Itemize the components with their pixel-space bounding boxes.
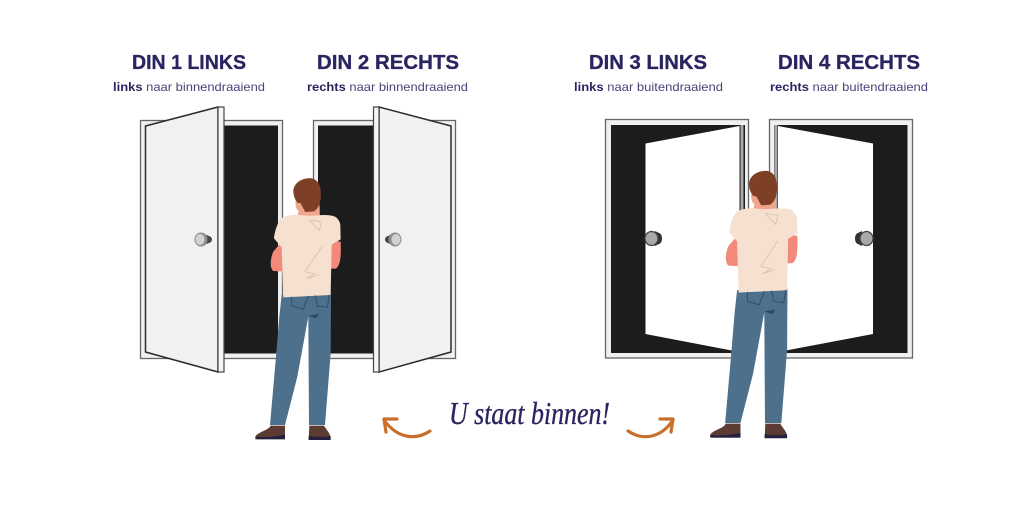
- subheading: links naar binnendraaiend: links naar binnendraaiend: [113, 80, 265, 94]
- subheading: links naar buitendraaiend: links naar buitendraaiend: [574, 80, 723, 94]
- door: DIN 4 right outward: [770, 120, 912, 358]
- door: DIN 2 right inward: [314, 107, 456, 372]
- heading: DIN 3 LINKS: DIN 3 LINKS: [589, 52, 707, 74]
- arrow: left curved orange: [384, 419, 430, 437]
- subheading: rechts naar binnendraaiend: rechts naar binnendraaiend: [307, 80, 468, 94]
- handwritten label: U staat binnen!: [449, 395, 610, 431]
- person: man seen from behind, right: [710, 171, 798, 438]
- arrow: right curved orange: [628, 419, 673, 437]
- door: DIN 3 left outward: [606, 120, 748, 358]
- subheading: rechts naar buitendraaiend: rechts naar buitendraaiend: [770, 80, 928, 94]
- heading: DIN 4 RECHTS: DIN 4 RECHTS: [778, 52, 920, 74]
- heading: DIN 2 RECHTS: DIN 2 RECHTS: [317, 52, 459, 74]
- door: DIN 1 left inward: [140, 107, 282, 372]
- person: man seen from behind, left: [255, 178, 341, 440]
- heading: DIN 1 LINKS: DIN 1 LINKS: [132, 52, 246, 74]
